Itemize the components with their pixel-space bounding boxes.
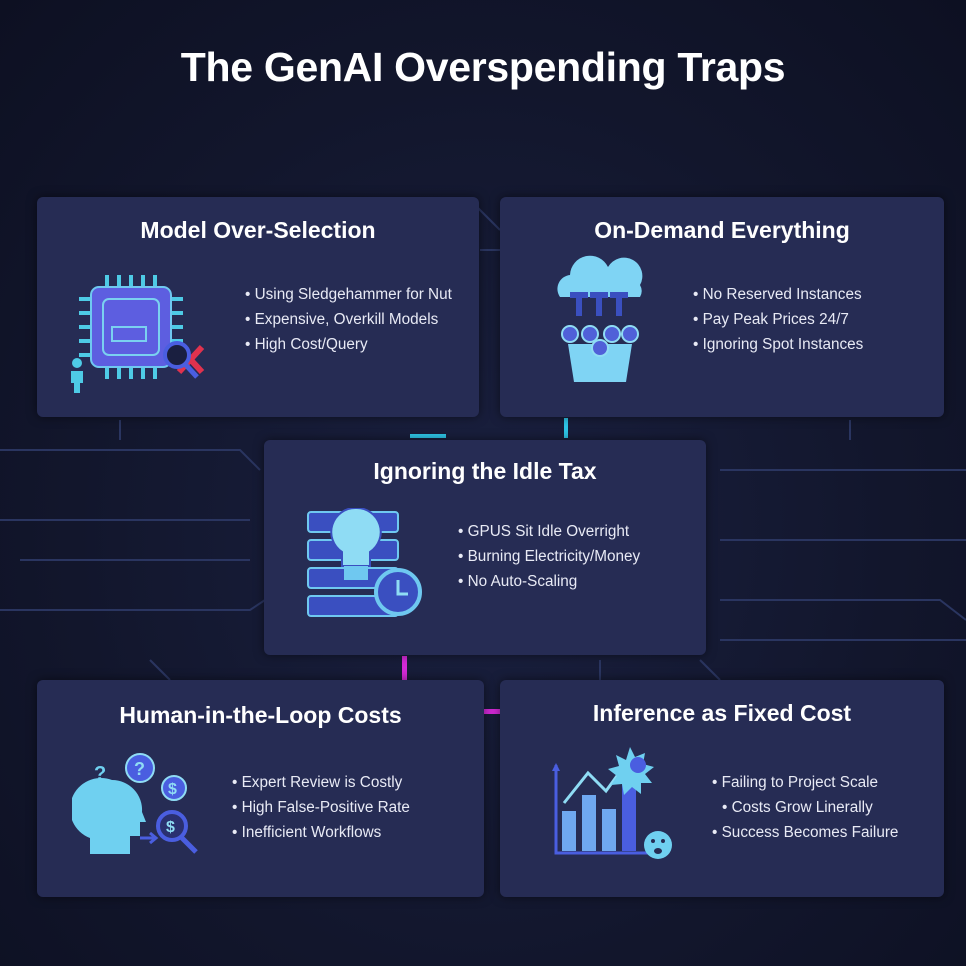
panel: model over-selection (37, 197, 479, 417)
heading: Inference as Fixed Cost (593, 700, 851, 726)
title: The GenAI Overspending Traps (181, 44, 785, 90)
heading: Human-in-the-Loop Costs (119, 702, 402, 728)
bullet list: Ignoring Spot Instances (703, 336, 863, 353)
icon: head with question and dollar: ? (94, 763, 106, 785)
bullet list: GPUS Sit Idle Overright (468, 523, 629, 540)
panel: inference as fixed cost (500, 680, 944, 897)
bullet list: Costs Grow Linerally (732, 799, 873, 816)
panel: on-demand everything (500, 197, 944, 417)
icon: bar chart with burst and sad face (552, 747, 672, 859)
bullet list (712, 774, 898, 841)
icon: cloud with bucket of coins (557, 256, 642, 382)
icon: head with question and dollar: $ (168, 781, 177, 798)
heading: On-Demand Everything (594, 217, 850, 243)
bullet list (458, 523, 640, 590)
bullet list: Inefficient Workflows (242, 824, 381, 841)
icon: head with question and dollar: ? (134, 759, 145, 779)
bullet list: High False-Positive Rate (242, 799, 410, 816)
icon: servers with bulb and clock (307, 508, 422, 617)
icon: head with question and dollar: $ (166, 819, 175, 836)
bullet list: No Reserved Instances (703, 286, 862, 303)
bullet list: Pay Peak Prices 24/7 (703, 311, 849, 328)
heading: Ignoring the Idle Tax (373, 458, 597, 484)
bullet list: No Auto-Scaling (468, 573, 577, 590)
bullet list (246, 286, 452, 353)
icon: head with question and dollar (72, 753, 198, 854)
heading: Model Over-Selection (140, 217, 376, 243)
bullet list: Expensive, Overkill Models (255, 311, 438, 328)
icon: chip with magnifier (71, 275, 204, 393)
panel: human-in-the-loop costs (37, 680, 484, 897)
bullet list: Expert Review is Costly (242, 774, 402, 791)
bullet list: Using Sledgehammer for Nut (255, 286, 452, 303)
panel: ignoring the idle tax (264, 440, 706, 655)
bullet list (694, 286, 863, 353)
bullet list (232, 774, 410, 841)
bullet list: High Cost/Query (255, 336, 368, 353)
bullet list: Burning Electricity/Money (468, 548, 640, 565)
bullet list: Failing to Project Scale (722, 774, 878, 791)
bullet list: Success Becomes Failure (722, 824, 898, 841)
